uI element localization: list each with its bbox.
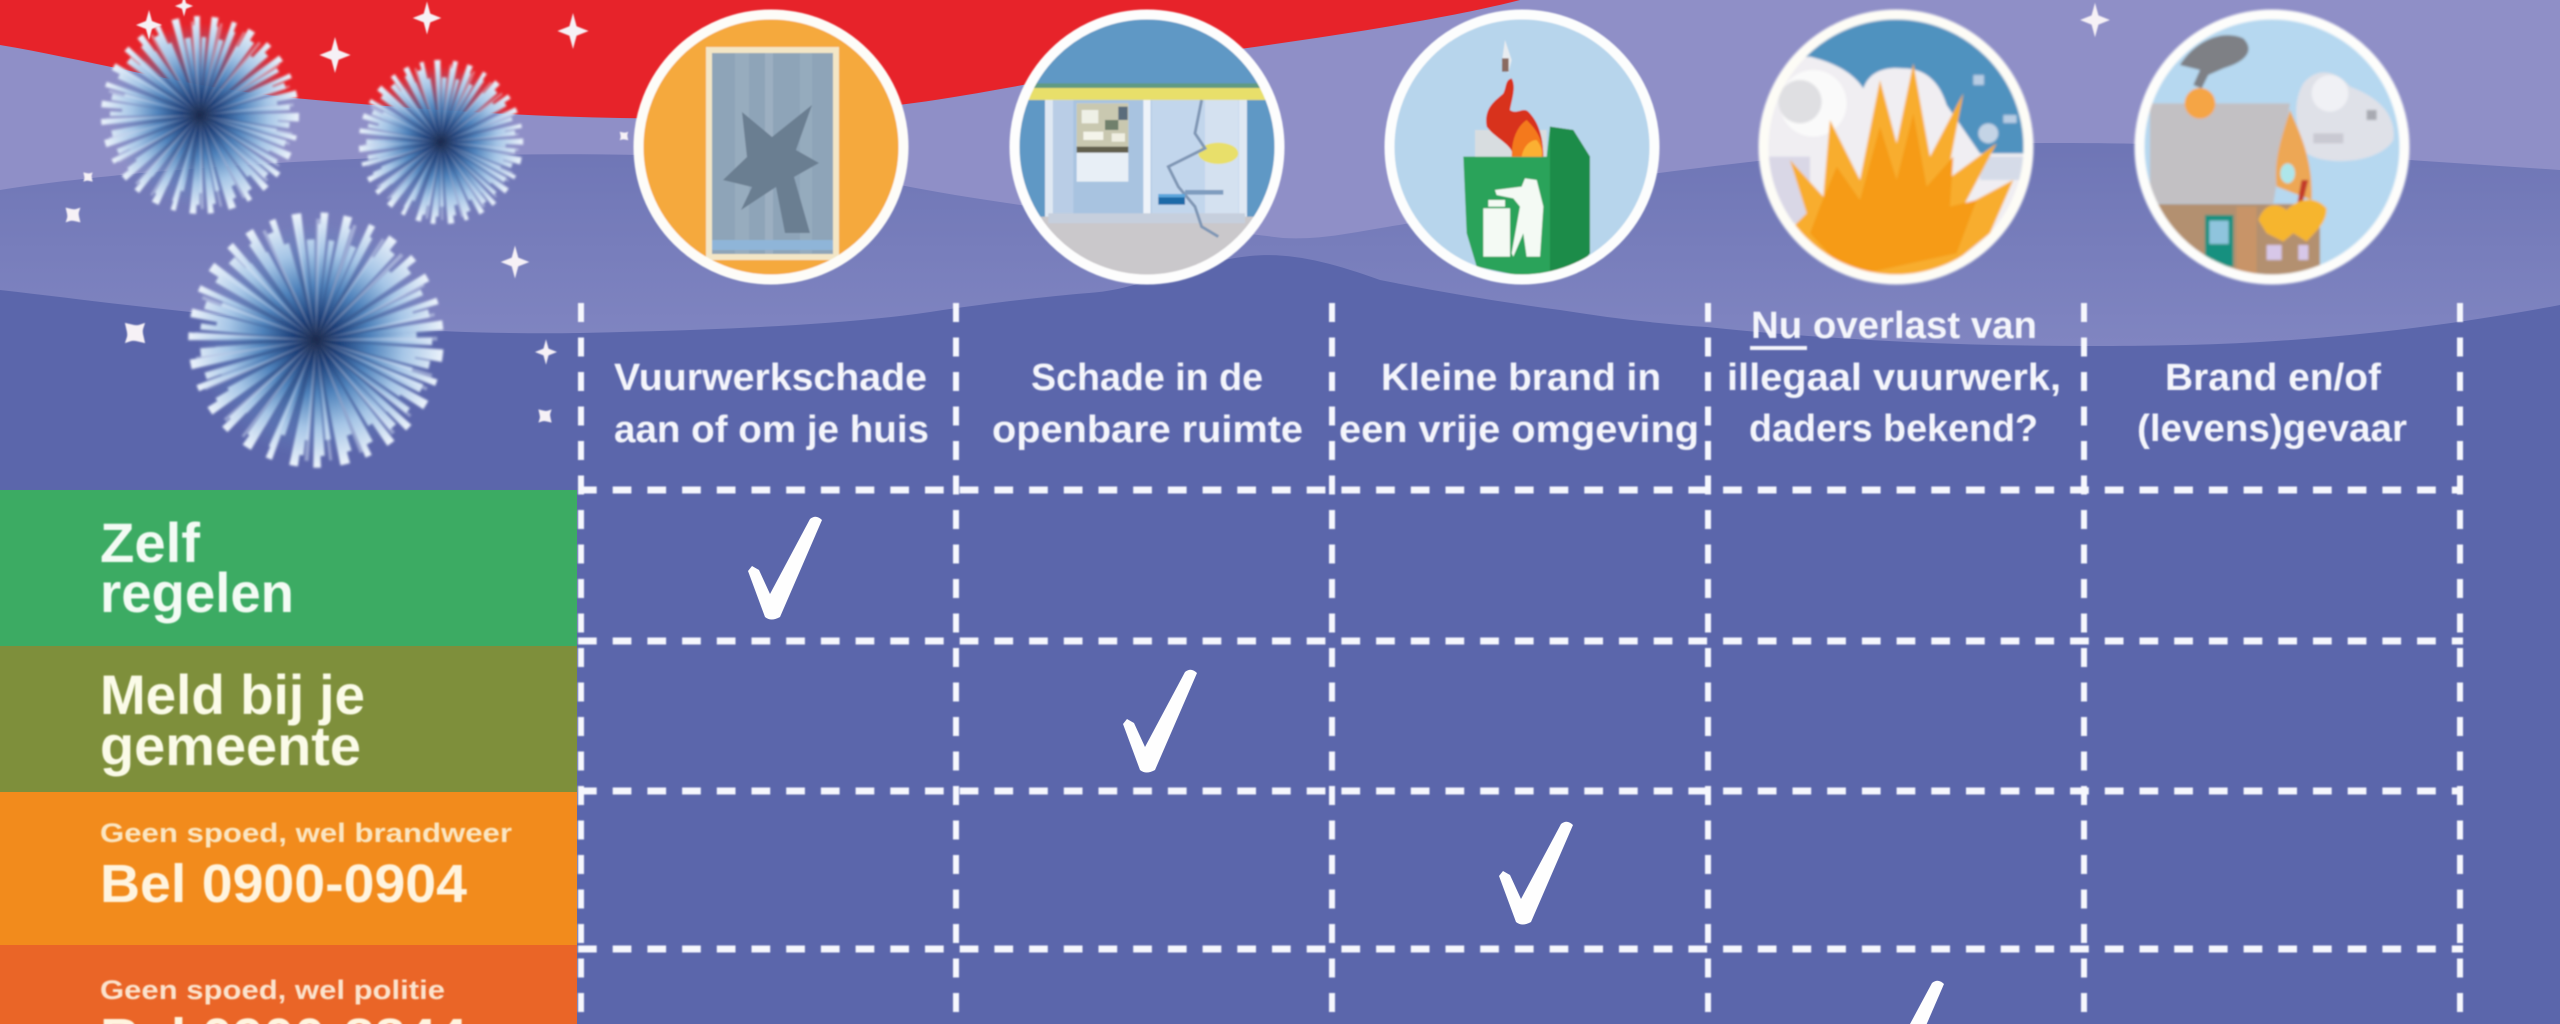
row band: Meld bij je gemeente: Meld bij je [100,663,365,726]
column heading: Vuurwerkschade aan of om je huis [614,357,929,451]
column heading: Brand en/of (levens)gevaar [2137,357,2407,450]
row band: Bel 0900-8844 politie [0,945,577,1024]
column heading: Schade in de openbare ruimte [992,357,1303,451]
column heading: Kleine brand in een vrije omgeving [1339,357,1699,451]
column heading: Brand en/of (levens)gevaar: Brand en/of [2165,357,2381,399]
check mark: row 3 column 3 [1499,822,1573,924]
check mark: row 2 column 2 [1123,670,1197,772]
column heading: Schade in de openbare ruimte: openbare ruimte [992,409,1303,451]
icon: explosion [1750,0,2040,290]
column heading: Nu overlast van illegaal vuurwerk, daders bekend?: illegaal vuurwerk, [1727,357,2061,399]
icon: broken window [630,0,920,290]
column heading: Nu overlast van illegaal vuurwerk, daders bekend?: daders bekend? [1749,408,2038,450]
icon: burning trash bin [1385,0,1665,290]
check mark: row 4 column 4 [1910,981,1944,1024]
check mark: row 1 column 1 [748,517,822,620]
row band: Bel 0900-0904 brandweer [0,792,577,945]
firework burst large [186,210,446,470]
column heading: Nu overlast van illegaal vuurwerk, daders bekend? [1727,305,2061,450]
dashed table grid [578,303,2463,1024]
row band: Zelf regelen: Zelf [100,511,200,574]
icon: damaged bus shelter [1005,0,1295,290]
row band: Zelf regelen [0,490,577,646]
background: red wave [0,0,1520,118]
row band: Bel 0900-0904 brandweer: Geen spoed, wel brandweer [100,818,513,848]
column heading: Kleine brand in een vrije omgeving: Kleine brand in [1381,357,1661,399]
column heading: Schade in de openbare ruimte: Schade in de [1031,357,1263,399]
background: dark wave [0,255,2560,1024]
fireworks illustration [108,23,532,470]
row band: Meld bij je gemeente [0,646,577,792]
column heading: Brand en/of (levens)gevaar: (levens)gevaar [2137,408,2407,450]
row band: Bel 0900-0904 brandweer: Bel 0900-0904 [100,854,467,914]
row band: Zelf regelen: regelen [100,561,294,624]
row band: Meld bij je gemeente: gemeente [100,714,361,777]
column heading: Vuurwerkschade aan of om je huis: Vuurwerkschade [614,357,927,399]
row band: Bel 0900-8844 politie: Geen spoed, wel politie [100,975,445,1005]
firework burst top right [350,51,532,233]
column heading: Vuurwerkschade aan of om je huis: aan of om je huis [614,409,929,451]
column heading: Nu overlast van illegaal vuurwerk, daders bekend?: Nu overlast van [1751,305,2037,347]
sparkling stars [58,0,2110,429]
firework burst top left [108,23,292,207]
column heading: Kleine brand in een vrije omgeving: een vrije omgeving [1339,409,1699,451]
icon: burning house [2130,0,2420,290]
